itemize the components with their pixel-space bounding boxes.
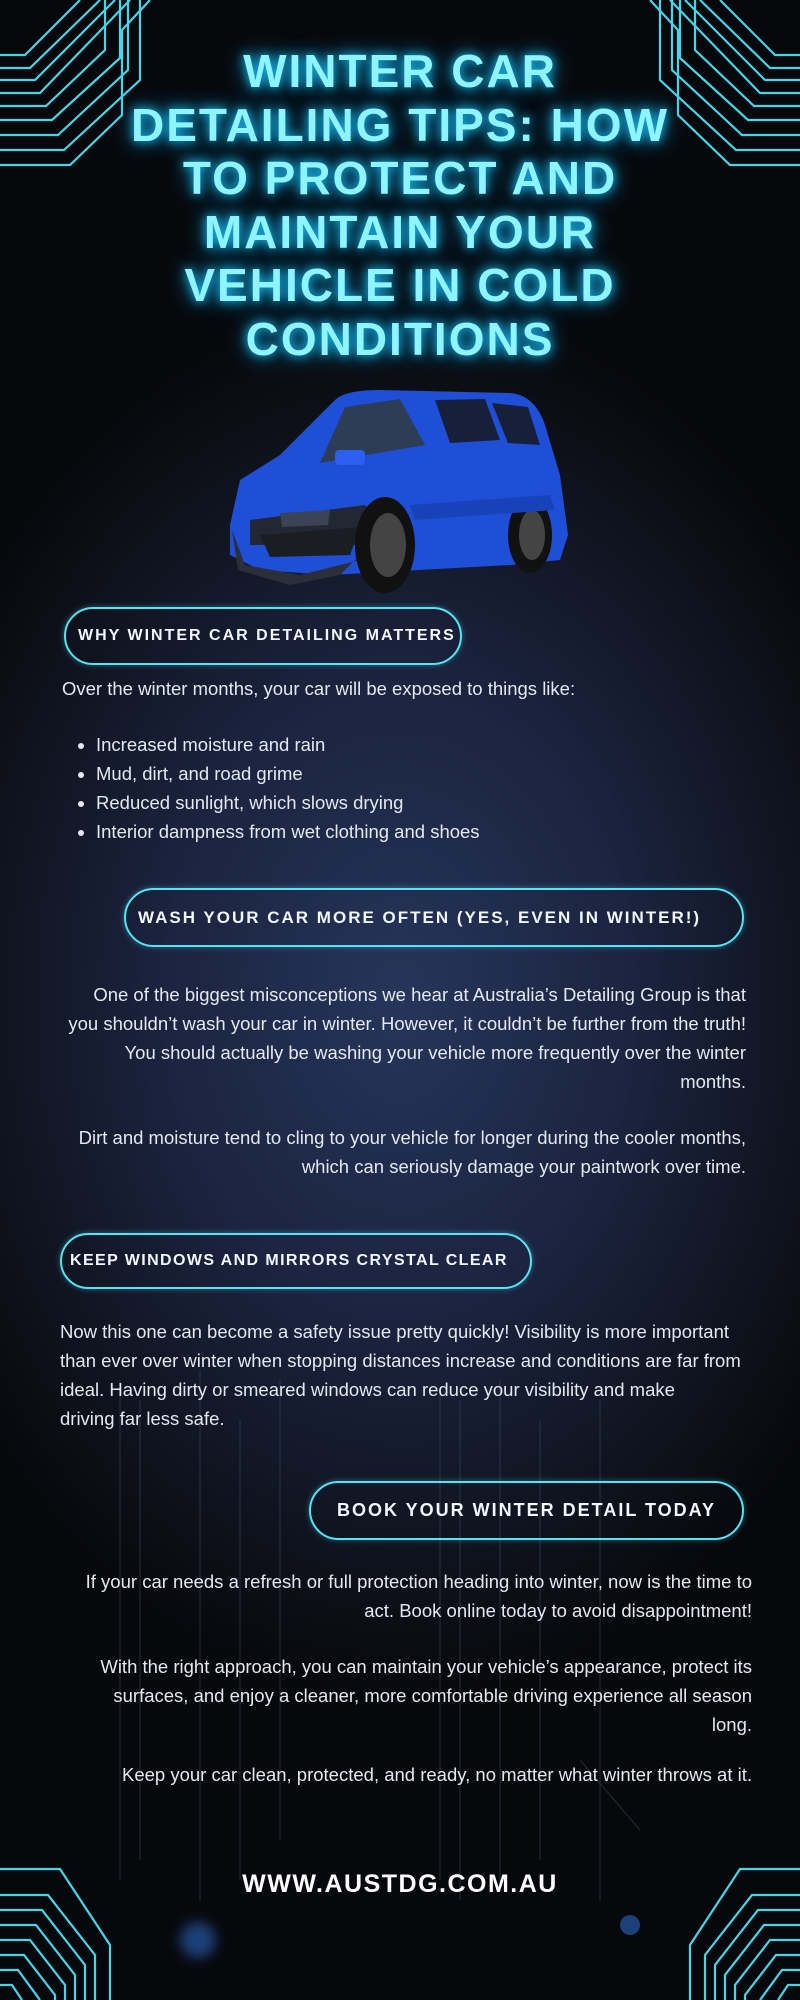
title: WINTER CAR <box>243 45 557 97</box>
pill: why winter car detailing matters <box>64 607 462 665</box>
title <box>118 38 680 370</box>
text block: intro and bullets: Reduced sunlight, which slows drying <box>96 792 403 813</box>
text block: booking: surfaces, and enjoy a cleaner, more comfortable driving experience all season <box>113 1685 752 1706</box>
pill: wash your car more often <box>124 888 744 947</box>
text block: intro and bullets: Increased moisture and rain <box>96 734 325 755</box>
text block: intro and bullets: Over the winter months, your car will be exposed to things like: <box>62 678 575 699</box>
text block: wash: One of the biggest misconceptions we hear at Australia’s Detailing Group is that <box>93 984 746 1005</box>
pill: book your winter detail today: BOOK YOUR WINTER DETAIL TODAY <box>337 1500 716 1520</box>
title: VEHICLE IN COLD <box>184 259 616 311</box>
title: DETAILING TIPS: HOW <box>131 98 669 150</box>
text block: wash: you shouldn’t wash your car in winter. However, it couldn’t be further from the truth! <box>68 1013 746 1034</box>
pill: why winter car detailing matters: WHY WINTER CAR DETAILING MATTERS <box>78 627 456 644</box>
text block: booking: act. Book online today to avoid disappointment! <box>364 1600 752 1621</box>
text block: windows: driving far less safe. <box>60 1408 225 1429</box>
text block: intro and bullets: Interior dampness from wet clothing and shoes <box>96 821 480 842</box>
text block: windows: Now this one can become a safety issue pretty quickly! Visibility is more important <box>60 1321 729 1342</box>
text block: windows <box>60 1321 741 1429</box>
pill: wash your car more often: WASH YOUR CAR MORE OFTEN (YES, EVEN IN WINTER!) <box>138 908 701 926</box>
text block: booking: With the right approach, you can maintain your vehicle’s appearance, protect its <box>100 1656 752 1677</box>
pill: keep windows and mirrors clear: KEEP WINDOWS AND MIRRORS CRYSTAL CLEAR <box>70 1252 508 1269</box>
title: MAINTAIN YOUR <box>204 206 596 258</box>
text block: windows: ideal. Having dirty or smeared windows can reduce your visibility and make <box>60 1379 675 1400</box>
text block: wash <box>68 984 746 1177</box>
text block: booking: If your car needs a refresh or full protection heading into winter, now is the time to <box>86 1571 752 1592</box>
pill: keep windows and mirrors clear <box>60 1233 532 1289</box>
text block: windows: than ever over winter when stopping distances increase and conditions are far from <box>60 1350 741 1371</box>
text block: wash: months. <box>680 1071 746 1092</box>
text block: wash: You should actually be washing your vehicle more frequently over the winter <box>125 1042 746 1063</box>
text block: intro and bullets: Mud, dirt, and road grime <box>96 763 303 784</box>
text block: booking <box>86 1571 752 1785</box>
title: CONDITIONS <box>246 312 554 364</box>
car illustration <box>230 390 568 593</box>
title: TO PROTECT AND <box>183 152 617 204</box>
pill: book your winter detail today <box>309 1481 744 1540</box>
footer url: WWW.AUSTDG.COM.AU <box>242 1870 558 1898</box>
text block: wash: Dirt and moisture tend to cling to your vehicle for longer during the cooler months, <box>79 1127 746 1148</box>
text block: booking: long. <box>712 1714 752 1735</box>
text block: booking: Keep your car clean, protected, and ready, no matter what winter throws at it. <box>122 1764 752 1785</box>
text block: wash: which can seriously damage your paintwork over time. <box>302 1156 746 1177</box>
text block: intro and bullets <box>62 678 575 842</box>
